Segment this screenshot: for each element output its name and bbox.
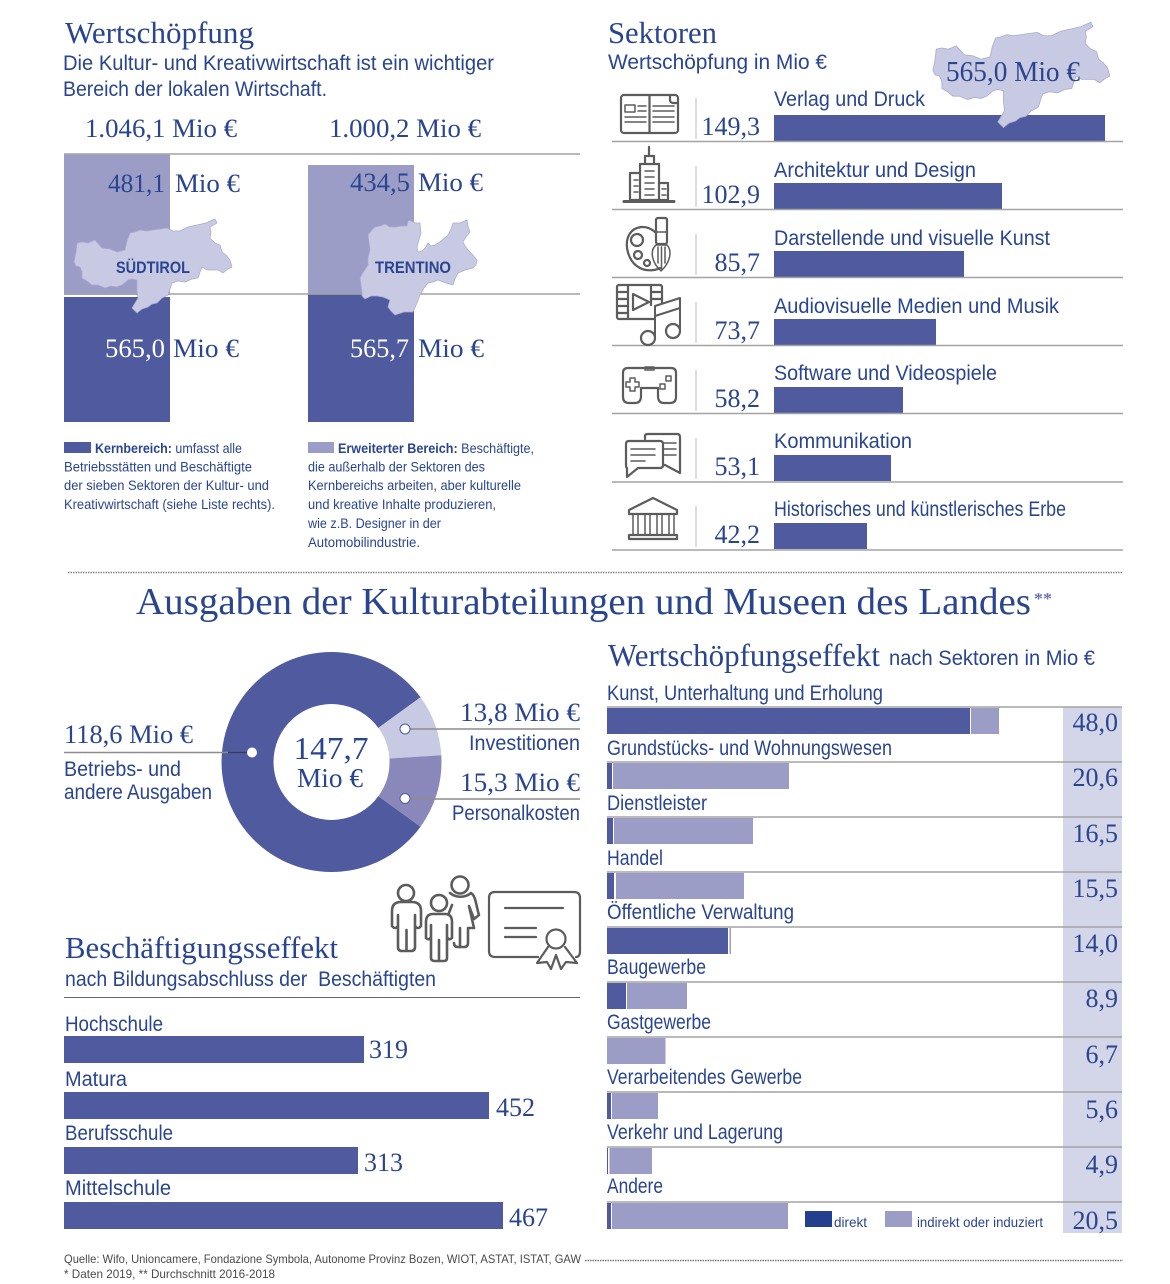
heading: Wertschöpfungseffekt: Wertschöpfungseffekt [608,637,880,673]
map: Südtirol with value [933,22,1110,128]
legend: indirekt oder induziert [917,1214,1043,1230]
row: Grundstücks- und Wohnungswesen [607,737,1118,792]
icon: open book [621,95,678,133]
total: Südtirol: 1.046,1 Mio € [85,114,237,143]
label: Betriebs- und andere Ausgaben: Betriebs- und [64,758,181,781]
row: Audiovisuelle Medien und Musik [617,285,1059,345]
legend: direkt [834,1214,867,1230]
row: Andere: Andere [607,1175,663,1198]
bar: Hochschule: Hochschule [65,1013,163,1036]
row: Verkehr und Lagerung [607,1121,1118,1179]
bar: Matura: Matura [65,1068,127,1091]
row: Software und Videospiele: Software und Videospiele [774,362,997,385]
icon: certificate [489,892,580,969]
row: Software und Videospiele: 58,2 [714,384,760,413]
legend text: Erweiterter Bereich: wie z.B. Designer in der [307,515,441,531]
row: Verlag und Druck: Verlag und Druck [774,88,925,111]
row: Historisches und künstlerisches Erbe: Historisches und künstlerisches Erbe [774,498,1066,521]
value: Trentino core [350,334,484,363]
slice: Investitionen [378,697,441,758]
heading: Beschäftigungsseffekt: Beschäftigungsseffekt [65,930,338,965]
row: Historisches und künstlerisches Erbe: 42,2 [714,520,760,549]
row: Dienstleister: 16,5 [1072,819,1118,848]
icon: palette and brush [627,218,670,271]
intro text: Die Kultur- und Kreativwirtschaft ist ein wichtiger [63,52,494,75]
value: Südtirol core [105,334,239,363]
row: Handel [607,847,1118,903]
bar: Matura [64,1068,535,1122]
bar: Mittelschule: Mittelschule [65,1177,171,1200]
row: Kommunikation [626,430,912,481]
legend text: Erweiterter Bereich [307,440,534,550]
row: Grundstücks- und Wohnungswesen: 20,6 [1072,763,1118,792]
legend text: Erweiterter Bereich: Automobilindustrie. [308,534,420,550]
row: Handel: Handel [607,847,663,870]
label: Südtirol: SÜDTIROL [116,258,190,277]
bar: Berufsschule: Berufsschule [65,1122,173,1145]
bar: Berufsschule: 313 [364,1148,403,1177]
donut chart: expenses [64,652,580,872]
row: Software und Videospiele [623,362,997,413]
panel: Wertschöpfung [63,15,580,550]
intro text: Bereich der lokalen Wirtschaft. [63,78,327,101]
row: Gastgewerbe: 6,7 [1086,1040,1118,1069]
row: Kunst, Unterhaltung und Erholung [607,682,1118,737]
subheading: Wertschöpfung in Mio € [608,51,827,74]
row: Andere: 20,5 [1072,1206,1118,1235]
row: Verarbeitendes Gewerbe [607,1066,1118,1124]
map: Südtirol with value: 565,0 Mio € [946,57,1080,88]
row: Darstellende und visuelle Kunst: 85,7 [714,248,760,277]
row: Kommunikation: 53,1 [714,452,760,481]
heading: Wertschöpfung: Wertschöpfung [65,15,254,50]
subheading: nach Sektoren in Mio € [889,647,1095,670]
bar: Matura: 452 [496,1093,535,1122]
row: Dienstleister: Dienstleister [607,792,707,815]
value: Südtirol core: 565,0 [105,334,165,363]
intro text [63,52,494,101]
total: Trentino: 1.000,2 Mio € [329,114,481,143]
stacked bar: Südtirol [64,154,170,422]
icon: family [392,876,479,961]
label: Personalkosten: Personalkosten [452,802,580,825]
heading: Sektoren: Sektoren [608,15,717,50]
row: Öffentliche Verwaltung [607,901,1118,958]
row: Verlag und Druck [621,88,925,141]
row: Darstellende und visuelle Kunst [627,218,1050,277]
center total: Mio € [297,763,363,793]
legend text: Kernbereich: Kreativwirtschaft (siehe Liste rechts). [64,496,275,512]
title: Ausgaben: Ausgaben der Kulturabteilungen und Museen des Landes [136,581,1031,623]
bar: Mittelschule: 467 [509,1203,548,1232]
label: Personalkosten: 15,3 Mio € [460,768,580,797]
row: Gastgewerbe: Gastgewerbe [607,1011,711,1034]
row: Öffentliche Verwaltung: Öffentliche Verwaltung [607,901,794,924]
footer: sources: * Daten 2019, ** Durchschnitt 2016-2018 [64,1267,275,1281]
row: Architektur und Design: Architektur und Design [774,159,976,182]
legend text: Kernbereich: Kernbereich: umfasst alle [95,440,242,456]
stacked bar: Trentino [308,165,414,422]
row: Grundstücks- und Wohnungswesen: Grundstücks- und Wohnungswesen [607,737,892,760]
value: Südtirol extended: Mio € [175,169,240,198]
center total [294,730,368,793]
bars [774,115,1105,549]
legend text: Erweiterter Bereich: Kernbereichs arbeiten, aber kulturelle [308,477,521,493]
row: Dienstleister [607,792,1118,848]
row: Historisches und künstlerisches Erbe [629,498,1066,549]
label: Betriebs- und andere Ausgaben: 118,6 Mio € [64,720,193,749]
panel: Sektoren [608,15,1123,550]
row: Audiovisuelle Medien und Musik: Audiovisuelle Medien und Musik [774,295,1059,318]
label: Trentino: TRENTINO [375,258,451,277]
bar: Berufsschule [64,1122,403,1177]
row: Kommunikation: Kommunikation [774,430,912,453]
row: Verkehr und Lagerung: Verkehr und Lagerung [607,1121,783,1144]
value: Südtirol extended [108,169,240,198]
label: Investitionen: 13,8 Mio € [460,698,580,727]
row: Darstellende und visuelle Kunst: Darstellende und visuelle Kunst [774,227,1050,250]
legend text: Erweiterter Bereich: und kreative Inhalte produzieren, [308,496,496,512]
row: Kunst, Unterhaltung und Erholung: Kunst, Unterhaltung und Erholung [607,682,883,705]
legend text: Erweiterter Bereich: Erweiterter Bereich: Beschäftigte, [338,440,534,456]
icon: skyscrapers [624,147,674,202]
row: Verarbeitendes Gewerbe: Verarbeitendes Gewerbe [607,1066,802,1089]
panel: Beschäftigungsseffekt [64,876,580,1232]
label: Personalkosten [452,768,580,825]
subheading: nach Bildungsabschluss der Beschäftigten [65,968,436,991]
row: Öffentliche Verwaltung: 14,0 [1072,929,1118,958]
value: Trentino extended [350,168,483,197]
icon: temple [629,498,677,539]
value: Trentino extended: 434,5 [350,168,410,197]
value: Südtirol extended: 481,1 [108,169,165,198]
value column [1063,707,1122,1233]
row: Baugewerbe: Baugewerbe [607,956,706,979]
center total: 147,7 [294,730,368,766]
bar: Hochschule: 319 [369,1035,408,1064]
row: Baugewerbe: 8,9 [1086,984,1118,1013]
row: Verarbeitendes Gewerbe: 5,6 [1086,1095,1118,1124]
row: Baugewerbe [607,956,1118,1013]
value: Trentino core: 565,7 [350,334,409,363]
legend text: Kernbereich: Betriebsstätten und Beschäftigte [64,458,252,474]
row: Handel: 15,5 [1072,874,1118,903]
row: Andere [607,1175,1118,1235]
row: Gastgewerbe [607,1011,1118,1069]
row: Architektur und Design [624,147,976,209]
icon: game controller [623,367,676,403]
footer: sources [64,1252,1123,1281]
label: Betriebs- und andere Ausgaben: andere Ausgaben [64,781,212,804]
row: Verkehr und Lagerung: 4,9 [1086,1150,1118,1179]
panel: Wertschöpfungseffekt [607,637,1122,1235]
legend [805,1211,1043,1230]
slice: Betriebs- und andere Ausgaben [222,652,420,872]
map: Südtirol [74,219,232,313]
icon: film and music [617,285,680,345]
map: Trentino [360,220,477,315]
legend text: Kernbereich: der sieben Sektoren der Kultur- und [64,477,269,493]
title: Ausgaben: ** [1034,589,1052,608]
label: Investitionen [460,698,580,755]
bar: Hochschule [64,1013,408,1064]
icon: speech bubbles [626,434,680,477]
value: Südtirol core: Mio € [173,334,239,363]
label: Investitionen: Investitionen [469,732,580,755]
row: Architektur und Design: 102,9 [702,180,760,209]
label: Betriebs- und andere Ausgaben [64,720,212,804]
legend text: Kernbereich [64,440,275,512]
legend text: Erweiterter Bereich: die außerhalb der Sektoren des [308,458,485,474]
bar: Mittelschule [64,1177,548,1232]
footer: sources: Quelle: Wifo, Unioncamere, Fondazione Symbola, Autonome Provinz Bozen, WIOT, ASTAT, ISTAT, GAW [64,1252,582,1266]
row: Verlag und Druck: 149,3 [702,112,760,141]
row: Kunst, Unterhaltung und Erholung: 48,0 [1072,708,1118,737]
row: Audiovisuelle Medien und Musik: 73,7 [714,316,760,345]
value: Trentino extended: Mio € [418,168,483,197]
value: Trentino core: Mio € [418,334,484,363]
slice: Personalkosten [378,755,442,827]
